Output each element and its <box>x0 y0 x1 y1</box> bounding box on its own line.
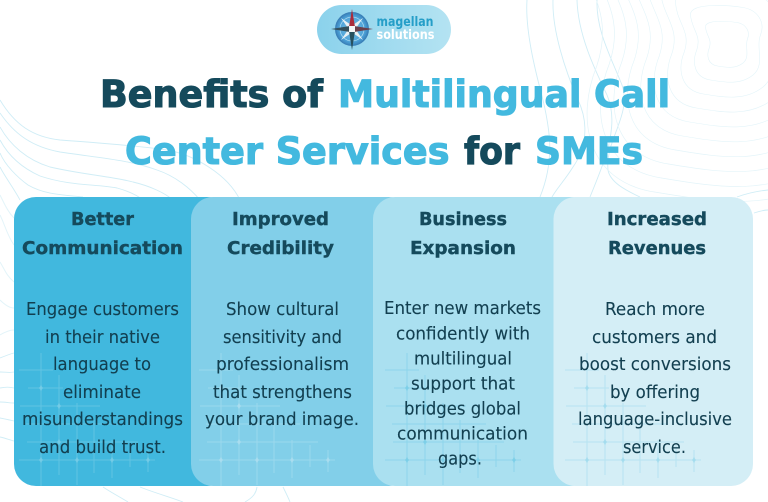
panel: Better Communication <box>14 197 230 486</box>
body text: confidently with <box>396 324 530 344</box>
icon: compass <box>331 9 373 50</box>
body text: customers and <box>592 328 717 348</box>
heading <box>410 209 516 259</box>
body text <box>578 300 732 458</box>
heading: Communication <box>22 238 183 259</box>
body text: language-inclusive <box>578 410 732 430</box>
body text: and build trust. <box>39 438 166 458</box>
background contour lines: right <box>527 0 768 213</box>
logo <box>317 5 451 54</box>
panel: Increased Revenues <box>554 197 753 486</box>
body text: bridges global <box>404 400 521 420</box>
logo wordmark <box>376 14 434 43</box>
heading: Better <box>71 209 134 230</box>
background contour lines: left <box>0 100 290 502</box>
body text: boost conversions <box>579 355 731 375</box>
body text: multilingual <box>414 350 512 370</box>
body text: that strengthens <box>213 383 352 403</box>
logo pill <box>317 5 451 54</box>
title <box>100 73 670 173</box>
heading: Increased <box>607 209 707 230</box>
heading: Revenues <box>608 238 706 259</box>
body text: sensitivity and <box>223 328 342 348</box>
body text: gaps. <box>438 450 482 470</box>
logo wordmark: magellan <box>376 14 434 30</box>
logo wordmark: solutions <box>376 27 434 43</box>
heading <box>227 209 334 259</box>
body text: in their native <box>45 328 160 348</box>
heading: Expansion <box>410 238 516 259</box>
body text <box>384 299 541 470</box>
heading <box>607 209 707 259</box>
body text: service. <box>623 438 686 458</box>
panel: Improved Credibility <box>191 197 411 486</box>
heading: Improved <box>232 209 329 230</box>
title: for <box>464 130 521 173</box>
body text: Engage customers <box>26 300 179 320</box>
body text: by offering <box>610 383 700 403</box>
body text: Show cultural <box>226 300 339 320</box>
title: Multilingual Call <box>338 73 670 116</box>
panel: Business Expansion <box>373 197 593 486</box>
body text: Enter new markets <box>384 299 541 319</box>
heading <box>22 209 183 259</box>
title: Center Services <box>125 130 450 173</box>
body text: Reach more <box>605 300 705 320</box>
body text <box>205 300 359 430</box>
body text: support that <box>411 374 515 394</box>
heading: Business <box>419 209 507 230</box>
body text: language to <box>53 355 151 375</box>
body text: communication <box>397 424 528 444</box>
body text: eliminate <box>63 383 141 403</box>
title: SMEs <box>535 130 643 173</box>
body text: misunderstandings <box>22 410 183 430</box>
heading: Credibility <box>227 238 334 259</box>
body text: your brand image. <box>205 410 359 430</box>
body text <box>22 300 183 458</box>
body text: professionalism <box>216 355 349 375</box>
title: Benefits of <box>100 73 324 116</box>
